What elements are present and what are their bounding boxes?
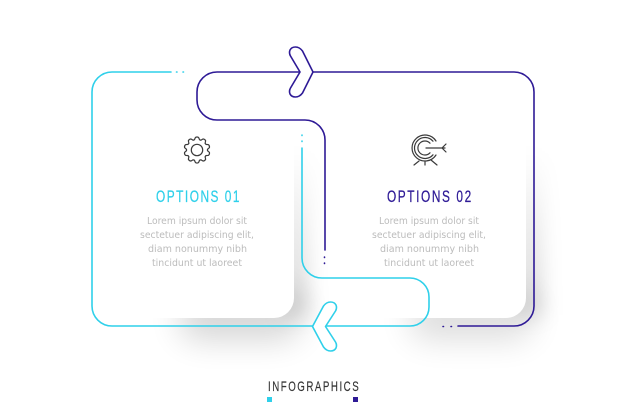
- icon: gear: [184, 137, 210, 163]
- icon: target: [412, 135, 446, 165]
- icon: navy arrow: [290, 47, 313, 97]
- text block: options 01 body: sectetuer adipiscing elit,: [140, 230, 254, 241]
- panel: card 1: [92, 72, 294, 318]
- text block: options 02 body: tincidunt ut laoreet: [384, 258, 474, 269]
- cyan connector line: [92, 72, 429, 326]
- heading: options 02: OPTIONS 02: [387, 188, 471, 207]
- text block: options 02 body: sectetuer adipiscing elit,: [372, 230, 486, 241]
- soft card shadows: [180, 150, 542, 340]
- text block: options 01 body: Lorem ipsum dolor sit: [147, 216, 247, 227]
- footer title: INFOGRAPHICS: [268, 380, 359, 394]
- legend square: navy: [353, 397, 358, 402]
- text block: options 02 body: [372, 216, 486, 269]
- legend square: cyan: [267, 397, 272, 402]
- panel: card 2: [332, 72, 526, 318]
- text block: options 02 body: diam nonummy nibh: [380, 244, 479, 255]
- text block: options 01 body: [140, 216, 254, 269]
- text block: options 02 body: Lorem ipsum dolor sit: [379, 216, 479, 227]
- icon: cyan arrow: [312, 302, 336, 351]
- text block: options 01 body: tincidunt ut laoreet: [152, 258, 242, 269]
- text block: options 01 body: diam nonummy nibh: [148, 244, 247, 255]
- heading: options 01: OPTIONS 01: [156, 188, 240, 207]
- navy connector line: [197, 72, 534, 326]
